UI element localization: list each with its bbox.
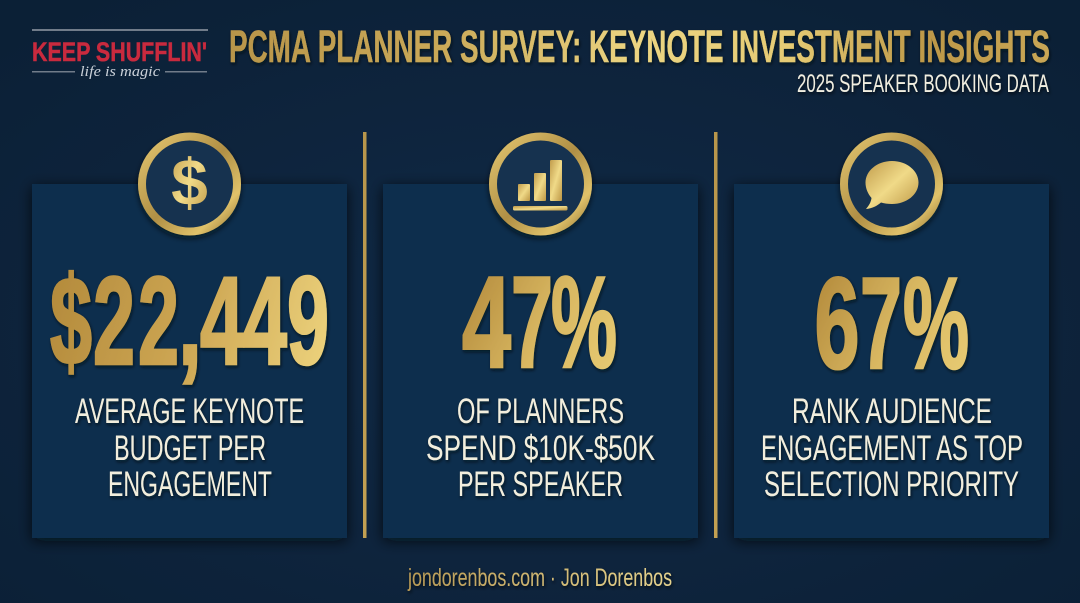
description (761, 392, 1023, 504)
description: BUDGET PER (114, 429, 266, 468)
description (75, 392, 304, 504)
big number: $ (50, 252, 92, 391)
big number: 6 (814, 250, 860, 396)
big number: , (178, 252, 202, 391)
panel: audience engagement (734, 136, 1049, 538)
big number: 7 (860, 250, 902, 396)
divider left (363, 132, 366, 538)
big number: % (551, 249, 617, 395)
big number: 9 (287, 252, 329, 391)
logo: Keep Shufflin': life is magic (80, 64, 160, 80)
big number: 2 (93, 252, 135, 391)
description: OF PLANNERS (457, 392, 624, 431)
description: PER SPEAKER (458, 465, 623, 504)
panel: planner spend (383, 136, 698, 538)
panel: average budget (32, 136, 347, 538)
logo: Keep Shufflin': KEEP SHUFFLIN' (32, 37, 207, 67)
divider right (714, 132, 718, 538)
icon: dollar sign (142, 136, 237, 232)
card background (32, 184, 347, 538)
card background (383, 184, 698, 538)
big number: 7 (511, 249, 553, 395)
footer: jondorenbos.com · Jon Dorenbos (407, 564, 672, 592)
big number: % (903, 250, 969, 396)
description (426, 392, 655, 504)
description: RANK AUDIENCE (792, 392, 992, 431)
description: SPEND $10K-$50K (426, 429, 655, 468)
icon: dollar sign: $ (171, 145, 208, 219)
description: ENGAGEMENT (108, 465, 272, 504)
big number: 4 (200, 252, 244, 391)
icon: bar chart (493, 136, 588, 232)
logo: Keep Shufflin' (32, 29, 208, 80)
big number: 4 (243, 252, 287, 391)
big number: 4 (462, 249, 511, 395)
card background (734, 184, 1049, 538)
big number: 2 (138, 252, 179, 391)
icon: speech bubble (844, 136, 939, 232)
description: AVERAGE KEYNOTE (75, 392, 304, 431)
